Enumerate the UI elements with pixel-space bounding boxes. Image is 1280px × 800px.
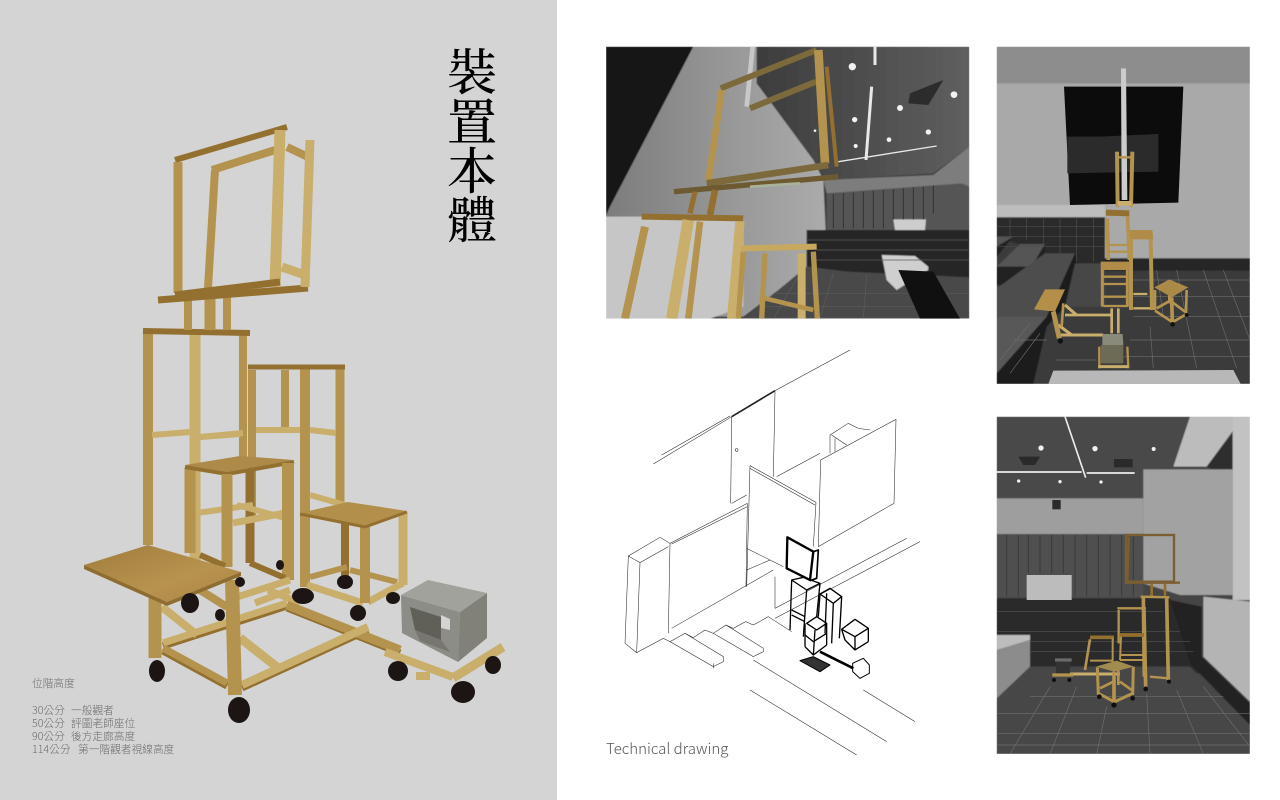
text block: height levels: 114公分 [32, 742, 71, 757]
block on tray [1098, 334, 1128, 368]
text block: height levels: 50公分 [32, 716, 65, 731]
center partition [747, 466, 816, 587]
text block: height levels: 30公分 [32, 703, 65, 718]
photo background [997, 417, 1250, 754]
title: 體 [447, 181, 497, 253]
title: 置 [447, 83, 497, 155]
caption: technical drawing: Technical drawing [606, 738, 728, 759]
text block: height levels: 一般觀者 [71, 703, 114, 718]
wall tile grid [997, 217, 1105, 262]
floor tile lines [997, 687, 1250, 754]
wooden frame [674, 50, 838, 215]
right partition [818, 419, 896, 547]
left partition and block [625, 495, 773, 653]
caster wheels [149, 560, 501, 723]
ceiling light strips [997, 417, 1135, 478]
back frame of the window [208, 140, 310, 288]
wood slat wall texture [1007, 535, 1133, 597]
tallest stool [143, 331, 250, 560]
photo background [606, 47, 969, 319]
dark window [1064, 87, 1183, 205]
base rails [162, 580, 400, 688]
stairs [637, 538, 920, 755]
text block: height levels: 第一階觀者視線高度 [78, 742, 175, 757]
front frame of the window [175, 127, 287, 295]
far table stool and long rail [1070, 637, 1120, 674]
text block: height levels: 90公分 [32, 729, 65, 744]
caster wheels [1052, 678, 1171, 708]
white pole [1121, 68, 1127, 200]
cube stool [1154, 279, 1189, 327]
wood slat wall texture [833, 186, 933, 228]
wooden tower [1101, 152, 1153, 310]
graffiti mural in the window [1067, 134, 1158, 173]
foreground small stool [738, 247, 817, 319]
photo: view from below toward the ceiling [606, 47, 969, 319]
black box [898, 270, 960, 319]
ceiling spotlights [1017, 445, 1156, 484]
drawn installation: towers and stools [790, 577, 869, 678]
block on tray [1052, 658, 1073, 675]
panel: left gray background [0, 0, 557, 800]
back tall stool [248, 367, 345, 575]
photo: wide stage view [997, 417, 1250, 754]
easel shelf and legs [158, 288, 308, 330]
ceiling vent [908, 80, 943, 105]
ceiling spotlights [814, 63, 957, 148]
stair edges [997, 612, 1193, 652]
ceiling vents [1018, 457, 1133, 509]
floor tile lines [1000, 270, 1250, 373]
drawn installation: frame [787, 537, 818, 581]
white floor slab [1048, 370, 1241, 384]
technical drawing [625, 350, 920, 755]
tabletop stool and rails [1034, 289, 1118, 344]
photo: front view at the window [997, 47, 1250, 384]
text block: height levels: 位階高度 [32, 676, 75, 691]
ceiling light strips [747, 47, 937, 162]
white block on stage [1027, 575, 1072, 600]
text block: height levels: 評圖老師座位 [71, 716, 135, 731]
cube stool [300, 502, 407, 603]
stair edges and floor tiles [760, 240, 969, 319]
middle stool [185, 456, 294, 580]
wooden easel frame [1125, 535, 1180, 596]
wooden installation model [84, 127, 503, 723]
wooden tower stools [1117, 597, 1169, 687]
title: 本 [447, 132, 497, 204]
foreground tall stool [625, 217, 743, 319]
text block: height levels: 後方走廊高度 [71, 729, 135, 744]
title: 裝 [447, 33, 497, 105]
upper wall and door lines [653, 350, 850, 503]
concrete block on tray [385, 580, 503, 680]
front cube stool [1096, 661, 1134, 703]
big tabletop stool [84, 545, 241, 695]
photo background [997, 47, 1250, 384]
